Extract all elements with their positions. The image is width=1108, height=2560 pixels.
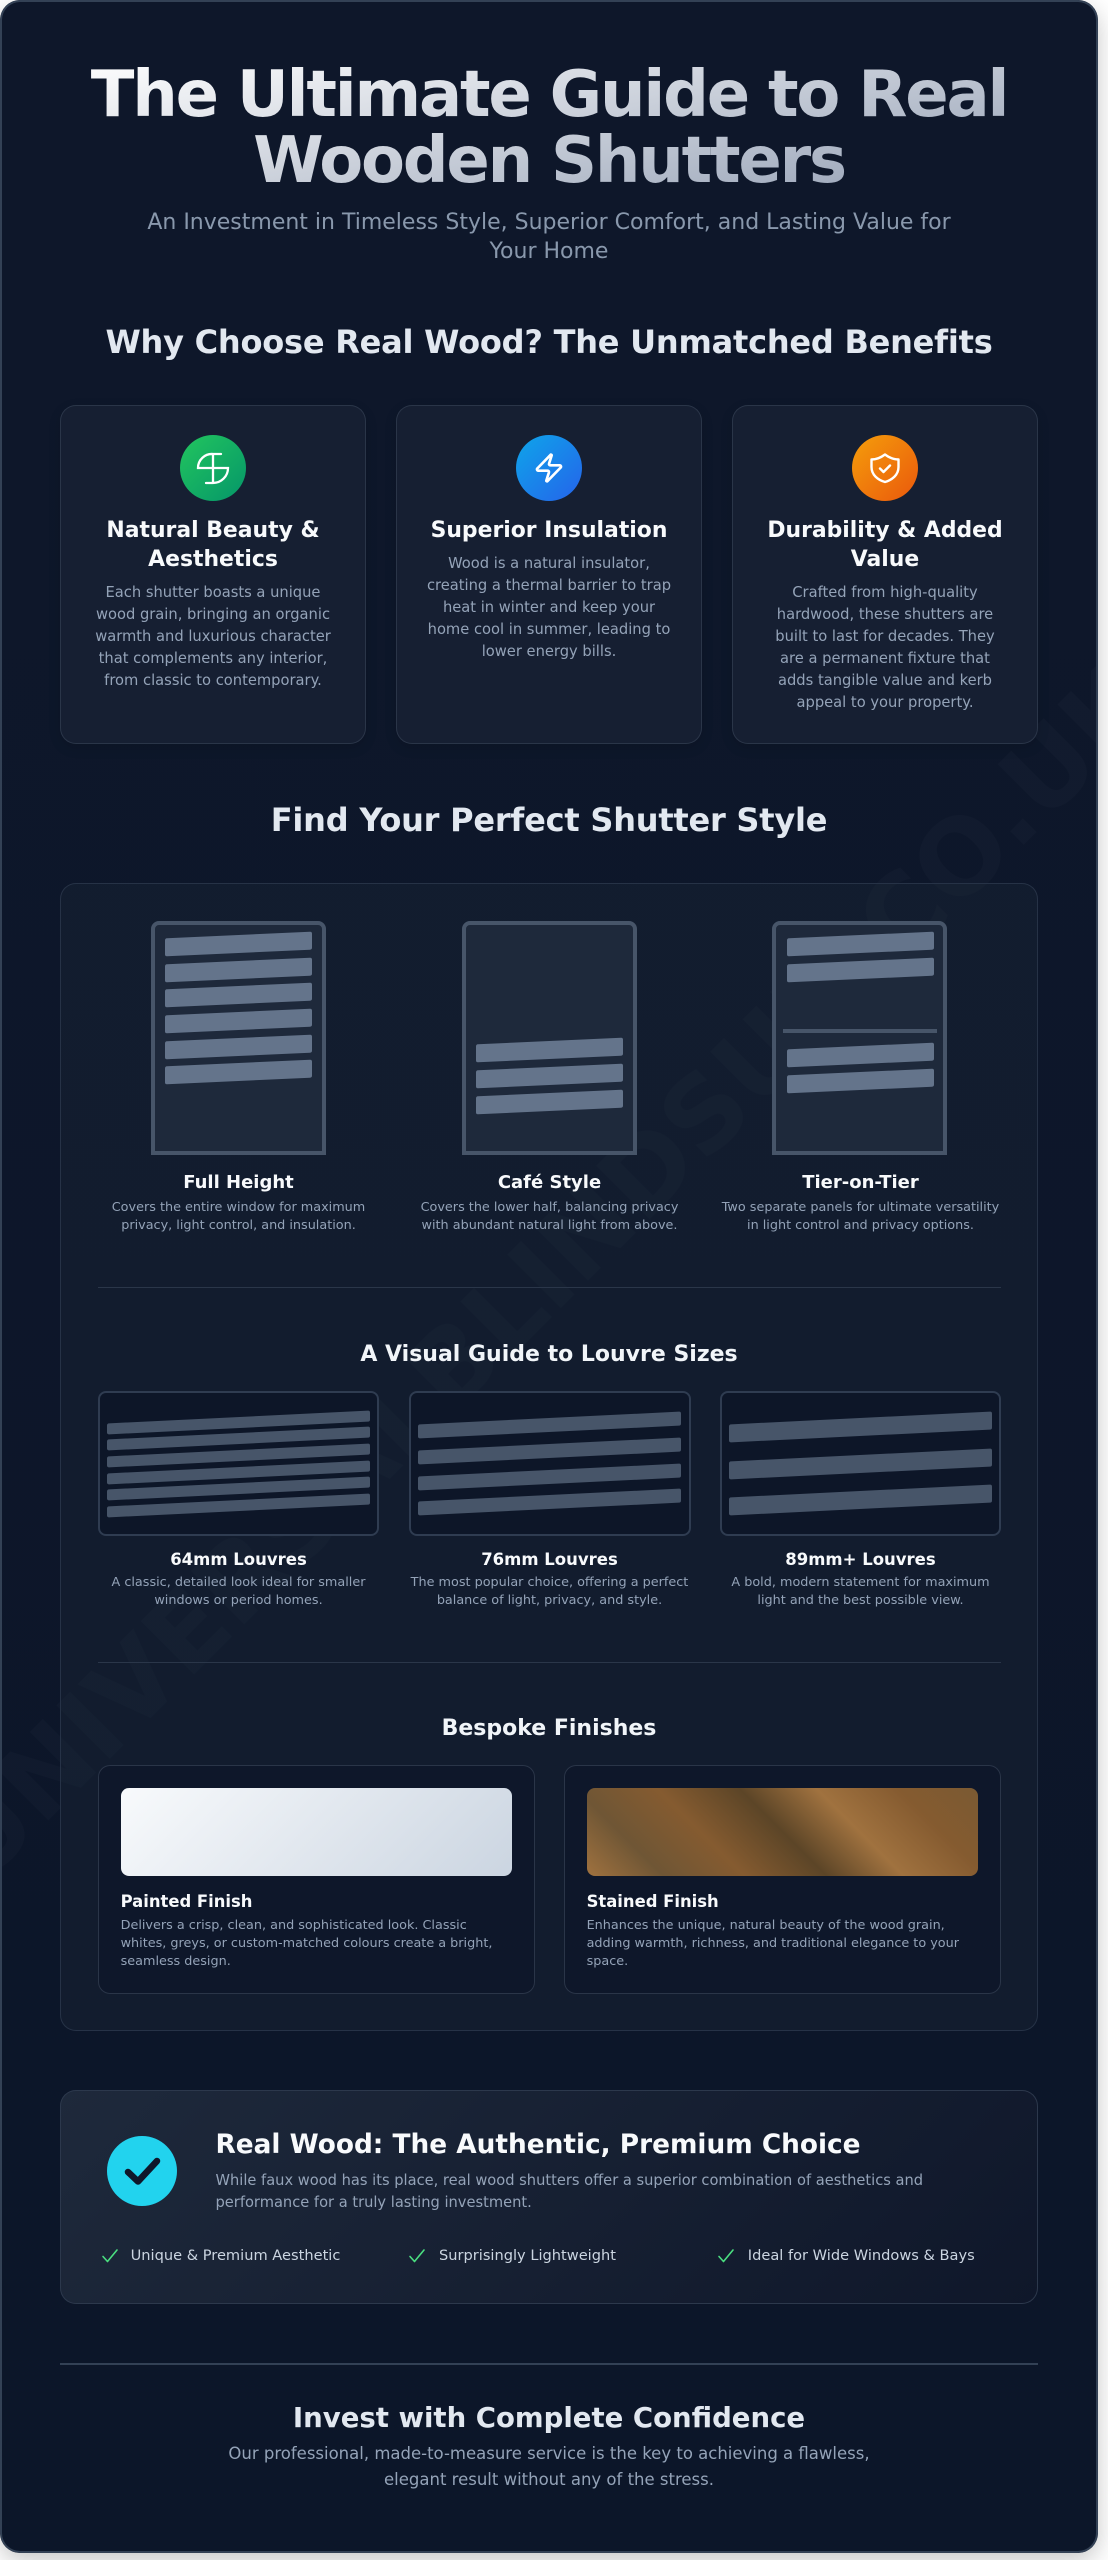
swatch: painted <box>121 1788 512 1876</box>
style text <box>421 1200 678 1233</box>
panel: superior insulation card <box>396 405 702 744</box>
finish card: stained <box>564 1765 1001 1994</box>
size text: windows or period homes. <box>154 1593 323 1608</box>
finish text: whites, greys, or custom-matched colours create a bright, <box>121 1936 492 1951</box>
shutter style: full height <box>112 921 365 1233</box>
panel: durability card <box>732 405 1038 744</box>
shutter style: cafe <box>421 921 678 1233</box>
card text: appeal to your property. <box>796 694 974 711</box>
icon: scales glyph <box>180 435 246 501</box>
footer text: Our professional, made-to-measure service is the key to achieving a flawless, <box>228 2444 870 2463</box>
style text <box>112 1200 365 1233</box>
style text: Covers the lower half, balancing privacy <box>421 1200 678 1215</box>
heading: finishes: Bespoke Finishes <box>442 1716 656 1741</box>
title: Wooden Shutters <box>253 124 845 198</box>
card text: Wood is a natural insulator, <box>448 555 650 572</box>
finish text: space. <box>587 1954 628 1969</box>
style text <box>722 1200 999 1233</box>
card text: that complements any interior, <box>99 650 327 667</box>
card text: Each shutter boasts a unique <box>106 584 320 601</box>
panel: natural beauty card <box>60 405 366 744</box>
style text: Covers the entire window for maximum <box>112 1200 365 1215</box>
size text: A bold, modern statement for maximum <box>731 1575 990 1590</box>
finish card: painted <box>98 1765 535 1994</box>
finish text: adding warmth, richness, and traditional elegance to your <box>587 1936 959 1951</box>
checklist item 1: Unique & Premium Aesthetic <box>131 2247 340 2264</box>
style text: Two separate panels for ultimate versatility <box>722 1200 999 1215</box>
callout title: Real Wood: The Authentic, Premium Choice <box>216 2130 861 2160</box>
card text: lower energy bills. <box>482 643 616 660</box>
size text: A classic, detailed look ideal for smaller <box>112 1575 365 1590</box>
heading: louvre sizes: A Visual Guide to Louvre Sizes <box>360 1342 738 1366</box>
style text: with abundant natural light from above. <box>422 1218 677 1233</box>
illustration: 89mm louvres <box>720 1391 1001 1536</box>
card text: heat in winter and keep your <box>443 599 655 616</box>
card text: are a permanent fixture that <box>780 650 990 667</box>
style name: Café Style <box>498 1172 601 1193</box>
style name: Tier-on-Tier <box>802 1172 919 1193</box>
card text <box>775 584 995 711</box>
finish text <box>121 1918 492 1969</box>
checklist item 3: Ideal for Wide Windows & Bays <box>748 2247 975 2264</box>
subtitle <box>147 210 951 264</box>
callout text: performance for a truly lasting investment. <box>216 2194 532 2211</box>
swatch: stained wood <box>587 1788 978 1876</box>
card title: Natural Beauty & <box>106 518 320 542</box>
louvre size: 89mm <box>720 1391 1001 1608</box>
finish text: Enhances the unique, natural beauty of the wood grain, <box>587 1918 945 1933</box>
illustration: full height shutter <box>151 921 326 1155</box>
style text: in light control and privacy options. <box>747 1218 974 1233</box>
size text <box>112 1575 366 1608</box>
card title <box>106 518 320 572</box>
illustration: tier-on-tier shutter <box>772 921 947 1155</box>
size text <box>410 1575 688 1608</box>
louvre size: 76mm <box>409 1391 691 1608</box>
card text <box>95 584 331 689</box>
subtitle: An Investment in Timeless Style, Superior Comfort, and Lasting Value for <box>147 210 951 234</box>
illustration: 64mm louvres <box>98 1391 379 1536</box>
illustration: 76mm louvres <box>408 1391 690 1536</box>
card text: wood grain, bringing an organic <box>96 606 330 623</box>
finish text: Delivers a crisp, clean, and sophisticated look. Classic <box>121 1918 467 1933</box>
size name: 89mm+ Louvres <box>785 1550 936 1569</box>
title <box>60 62 1038 194</box>
card text: adds tangible value and kerb <box>778 672 992 689</box>
shutter style: tier on tier <box>722 921 999 1233</box>
card title: Aesthetics <box>148 547 278 572</box>
card text: creating a thermal barrier to trap <box>427 577 671 594</box>
size text: light and the best possible view. <box>757 1593 964 1608</box>
card title: Value <box>851 547 919 572</box>
icon: lightning bolt <box>516 435 582 501</box>
icon: cyan check badge <box>107 2136 177 2206</box>
finish text <box>587 1918 959 1969</box>
card title: Superior Insulation <box>431 518 667 542</box>
panel: shutter styles, louvres and finishes <box>60 883 1038 2031</box>
checklist item 2: Surprisingly Lightweight <box>439 2247 616 2264</box>
style text: privacy, light control, and insulation. <box>121 1218 356 1233</box>
card text: warmth and luxurious character <box>95 628 331 645</box>
card title: Durability & Added <box>767 518 1003 542</box>
finish name: Painted Finish <box>121 1892 252 1911</box>
size name: 64mm Louvres <box>170 1550 307 1569</box>
card text: built to last for decades. They <box>775 628 995 645</box>
footer heading: Invest with Complete Confidence <box>293 2402 805 2434</box>
card text: from classic to contemporary. <box>104 672 322 689</box>
finish text: seamless design. <box>121 1954 231 1969</box>
footer text: elegant result without any of the stress. <box>384 2470 714 2489</box>
size name: 76mm Louvres <box>481 1550 618 1569</box>
size text: balance of light, privacy, and style. <box>437 1593 662 1608</box>
subtitle: Your Home <box>490 238 608 264</box>
heading: benefits: Why Choose Real Wood? The Unmatched Benefits <box>105 323 993 361</box>
footer text <box>228 2444 870 2489</box>
style name: Full Height <box>183 1172 294 1193</box>
icon: shield check <box>852 435 918 501</box>
card text: Crafted from high-quality <box>792 584 978 601</box>
card title <box>767 518 1003 572</box>
title: The Ultimate Guide to Real <box>91 58 1007 132</box>
heading: shutter styles: Find Your Perfect Shutter Style <box>271 801 827 839</box>
card text: home cool in summer, leading to <box>428 621 670 638</box>
louvre size: 64mm <box>98 1391 379 1608</box>
callout text: While faux wood has its place, real wood shutters offer a superior combination of aesthetics and <box>216 2172 923 2189</box>
panel: premium choice callout <box>60 2090 1038 2304</box>
finish name: Stained Finish <box>587 1892 719 1911</box>
illustration: cafe shutter <box>462 921 637 1155</box>
card text <box>427 555 671 660</box>
callout text <box>216 2172 923 2211</box>
card text: hardwood, these shutters are <box>777 606 993 623</box>
size text <box>731 1575 990 1608</box>
size text: The most popular choice, offering a perfect <box>411 1575 688 1590</box>
